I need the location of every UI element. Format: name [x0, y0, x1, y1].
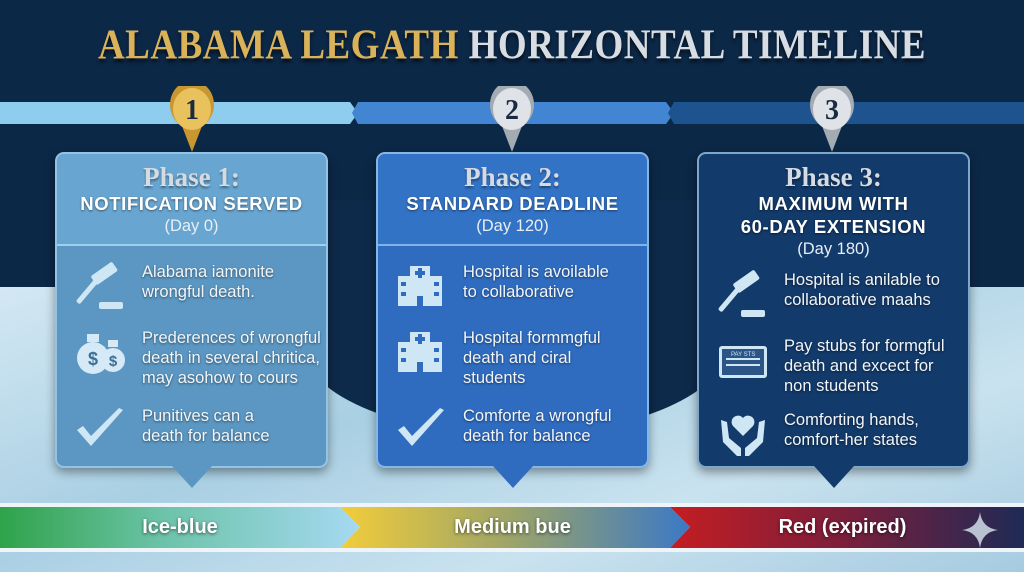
bottom status bar — [0, 503, 1024, 552]
pin 1: 1 — [185, 95, 199, 126]
item: gavel: Alabama iamonite — [142, 263, 274, 281]
item: hospital: Hospital is avoilable — [463, 263, 609, 281]
item: check — [77, 407, 270, 446]
label: medium: Medium bue — [454, 516, 571, 538]
pin 3 — [810, 86, 854, 152]
phase 2 header: STANDARD DEADLINE — [406, 193, 619, 214]
phase 3 header: 60-DAY EXTENSION — [741, 216, 926, 237]
item: hospital 2: death and ciral — [463, 349, 571, 367]
panel: phase 2 — [376, 152, 649, 468]
item: pay stub: PAY STS — [731, 352, 755, 358]
phase 2 header: Phase 2: — [464, 162, 561, 192]
item: hospital — [398, 263, 610, 306]
item: hospital: to collaborative — [463, 283, 574, 301]
phase 3 header: MAXIMUM WITH — [758, 193, 909, 214]
item: hospital 2: students — [463, 369, 525, 387]
item: money bags: $ — [109, 353, 118, 370]
phase 3 header: Phase 3: — [785, 162, 882, 192]
phase 2 header: (Day 120) — [476, 217, 549, 235]
background dark hill — [300, 200, 730, 435]
phase 1 header: NOTIFICATION SERVED — [80, 193, 303, 214]
item: pay stub: non students — [784, 377, 878, 395]
item: gavel: collaborative maahs — [784, 291, 931, 309]
item: check — [398, 407, 612, 446]
phase 3 header: (Day 180) — [797, 240, 870, 258]
panel: phase 1 — [55, 152, 328, 468]
item: gavel — [76, 262, 274, 309]
pin 1 — [170, 86, 214, 152]
phase 1 header: Phase 1: — [143, 162, 240, 192]
phase 2 header — [378, 154, 647, 246]
item: money bags: $ — [88, 349, 98, 369]
item: hands heart: comfort-her states — [784, 431, 917, 449]
item: check: death for balance — [463, 427, 591, 445]
item: gavel — [718, 270, 940, 317]
phase 1 header: (Day 0) — [164, 217, 219, 235]
item: check: Punitives can a — [142, 407, 254, 425]
item: pay stub: Pay stubs for formgful — [784, 337, 944, 355]
label: ice-blue: Ice-blue — [142, 516, 218, 538]
title: ALABAMA LEGATH HORIZONTAL TIMELINE — [98, 22, 926, 69]
item: gavel: Hospital is anilable to — [784, 271, 940, 289]
item: pay stub — [719, 337, 944, 395]
item: money bags — [77, 329, 321, 388]
item: money bags: death in several chritica, — [142, 349, 320, 367]
item: gavel: wrongful death. — [142, 283, 255, 301]
pin 2 — [490, 86, 534, 152]
timeline bar — [0, 102, 1024, 124]
item: hands heart — [721, 411, 919, 456]
phase 1 header — [57, 154, 326, 246]
label: red: Red (expired) — [779, 516, 906, 538]
item: money bags: may asohow to cours — [142, 369, 298, 387]
panel: phase 3 — [697, 152, 970, 468]
item: hospital 2 — [398, 329, 601, 387]
item: pay stub: death and excect for — [784, 357, 934, 375]
item: hands heart: Comforting hands, — [784, 411, 919, 429]
item: money bags: Prederences of wrongful — [142, 329, 321, 347]
background ice — [0, 287, 1024, 572]
item: check: Comforte a wrongful — [463, 407, 612, 425]
pin 3: 3 — [825, 95, 839, 126]
icon: star — [962, 512, 998, 548]
item: check: death for balance — [142, 427, 270, 445]
phase 3 header — [740, 162, 926, 258]
item: hospital 2: Hospital formmgful — [463, 329, 601, 347]
pin 2: 2 — [505, 95, 519, 126]
